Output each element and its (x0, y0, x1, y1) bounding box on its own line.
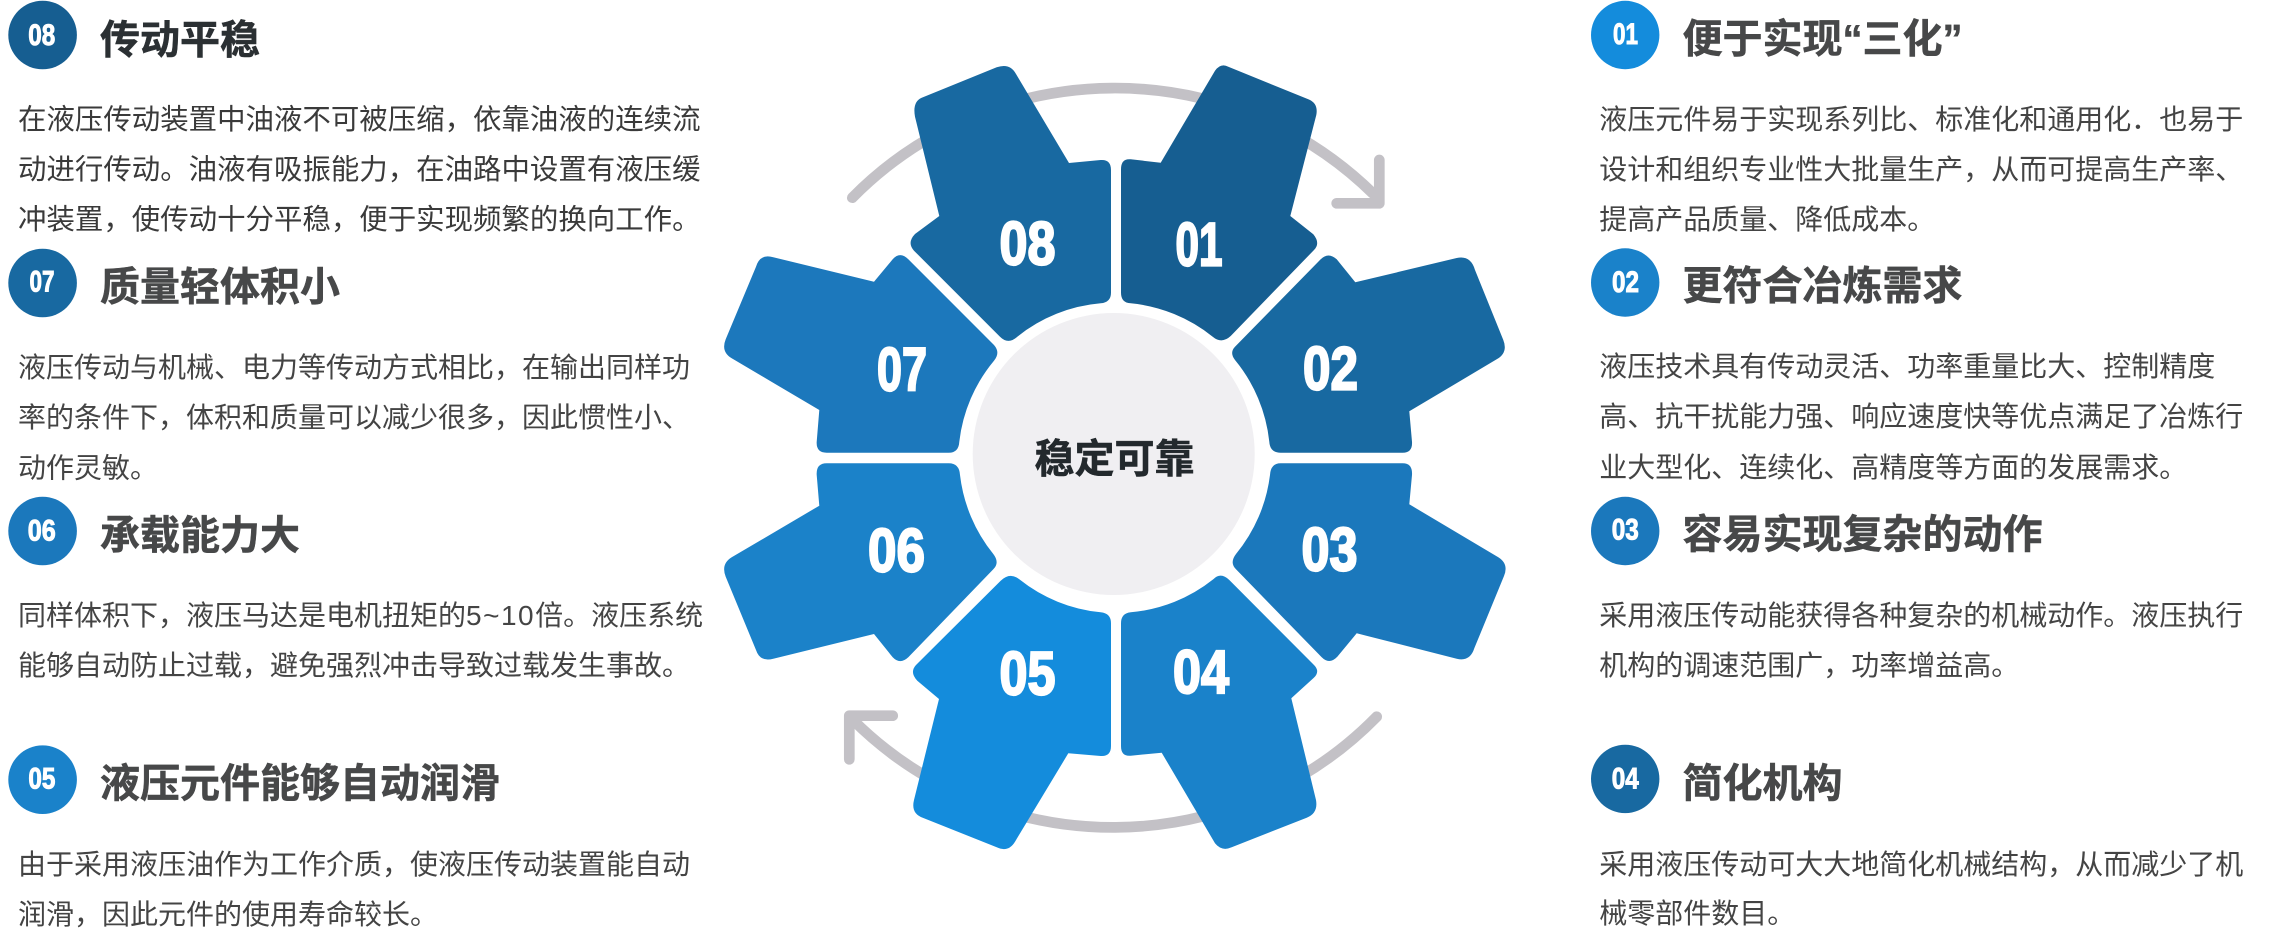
heading 03: 容易实现复杂的动作 (1682, 513, 2042, 557)
panel: 08 传动平稳 (8, 1, 701, 236)
body 04: 械零部件数目。 (1599, 898, 1795, 929)
heading 02: 更符合冶炼需求 (1682, 264, 1962, 308)
wheel segment 06: 06 (868, 516, 925, 584)
body 07: 率的条件下，体积和质量可以减少很多，因此惯性小、 (18, 402, 690, 433)
badge 03: 03 (1612, 513, 1639, 546)
wheel segment 01: 01 (1176, 210, 1222, 278)
body 05: 由于采用液压油作为工作介质，使液压传动装置能自动 (18, 849, 690, 880)
body 06: 同样体积下，液压马达是电机扭矩的5~10倍。液压系统 (18, 600, 703, 631)
badge 04: 04 (1612, 762, 1639, 796)
panel: 04 简化机构 (1591, 745, 2243, 929)
wheel segment 02: 02 (1303, 334, 1358, 402)
body 03 (1599, 600, 2243, 681)
body 03: 机构的调速范围广，功率增益高。 (1599, 650, 2019, 681)
body 02: 业大型化、连续化、高精度等方面的发展需求。 (1599, 452, 2187, 483)
body 01 (1599, 104, 2243, 235)
body 06 (18, 600, 703, 681)
body 08: 冲装置，使传动十分平稳，便于实现频繁的换向工作。 (18, 204, 701, 236)
badge 04 (1591, 745, 1659, 813)
body 05: 润滑，因此元件的使用寿命较长。 (18, 899, 438, 930)
badge 02 (1591, 248, 1659, 317)
badge 08 (8, 1, 77, 69)
body 06: 能够自动防止过载，避免强烈冲击导致过载发生事故。 (18, 650, 690, 681)
heading 07: 质量轻体积小 (100, 266, 340, 310)
wheel segment 07: 07 (877, 336, 927, 404)
wheel segment 08 (911, 66, 1111, 341)
wheel segment 06 (724, 463, 997, 661)
body 01: 设计和组织专业性大批量生产，从而可提高生产率、 (1599, 154, 2243, 185)
body 03: 采用液压传动能获得各种复杂的机械动作。液压执行 (1599, 600, 2243, 631)
body 08: 动进行传动。油液有吸振能力，在油路中设置有液压缓 (18, 154, 701, 186)
body 04 (1599, 849, 2243, 929)
center circle (973, 313, 1255, 595)
heading 05: 液压元件能够自动润滑 (100, 762, 500, 806)
body 08: 在液压传动装置中油液不可被压缩，依靠油液的连续流 (18, 104, 701, 136)
panel: 06 承载能力大 (8, 497, 703, 681)
wheel segment 07 (724, 255, 997, 453)
body 04: 采用液压传动可大大地简化机械结构，从而减少了机 (1599, 849, 2243, 880)
body 05 (18, 849, 690, 930)
heading 08: 传动平稳 (100, 18, 260, 62)
badge 05: 05 (28, 762, 55, 796)
panel: 07 质量轻体积小 (8, 249, 690, 484)
wheel segment 05: 05 (1000, 640, 1056, 708)
wheel segment 04 (1121, 576, 1317, 849)
badge 06: 06 (28, 514, 56, 547)
body 01: 提高产品质量、降低成本。 (1599, 204, 1935, 235)
badge 07 (8, 249, 77, 317)
badge 01 (1591, 1, 1659, 69)
badge 02: 02 (1612, 266, 1639, 299)
body 07: 液压传动与机械、电力等传动方式相比，在输出同样功 (18, 352, 690, 383)
badge 05 (8, 745, 77, 814)
heading 06: 承载能力大 (100, 514, 300, 558)
body 02: 高、抗干扰能力强、响应速度快等优点满足了冶炼行 (1599, 401, 2243, 432)
cycle arrow: top arc (852, 88, 1379, 203)
body 02 (1599, 351, 2243, 483)
body 02: 液压技术具有传动灵活、功率重量比大、控制精度 (1599, 351, 2215, 382)
badge 03 (1591, 497, 1659, 565)
wheel segment 04: 04 (1173, 638, 1229, 706)
wheel segment 01 (1121, 65, 1317, 340)
wheel segment 02 (1232, 256, 1505, 453)
wheel segment 03 (1233, 463, 1506, 661)
body 07: 动作灵敏。 (18, 452, 158, 484)
panel: 01 便于实现“三化” (1591, 1, 2243, 235)
panel: 05 液压元件能够自动润滑 (8, 745, 690, 930)
panel: 02 更符合冶炼需求 (1591, 248, 2243, 483)
body 07 (18, 352, 690, 484)
body 08 (18, 104, 701, 236)
badge 01: 01 (1613, 18, 1638, 51)
panel: 03 容易实现复杂的动作 (1591, 497, 2243, 681)
center circle: 稳定可靠 (1034, 438, 1194, 482)
cycle arrow: bottom arc (849, 716, 1377, 827)
heading 01: 便于实现“三化” (1682, 18, 1962, 62)
badge 07: 07 (30, 266, 54, 298)
wheel segment 08: 08 (1000, 210, 1056, 278)
wheel segment 05 (913, 576, 1111, 849)
wheel segment 03: 03 (1302, 516, 1358, 584)
badge 08: 08 (28, 19, 55, 52)
heading 04: 简化机构 (1682, 762, 1842, 806)
body 01: 液压元件易于实现系列比、标准化和通用化．也易于 (1599, 104, 2243, 135)
badge 06 (8, 497, 77, 565)
